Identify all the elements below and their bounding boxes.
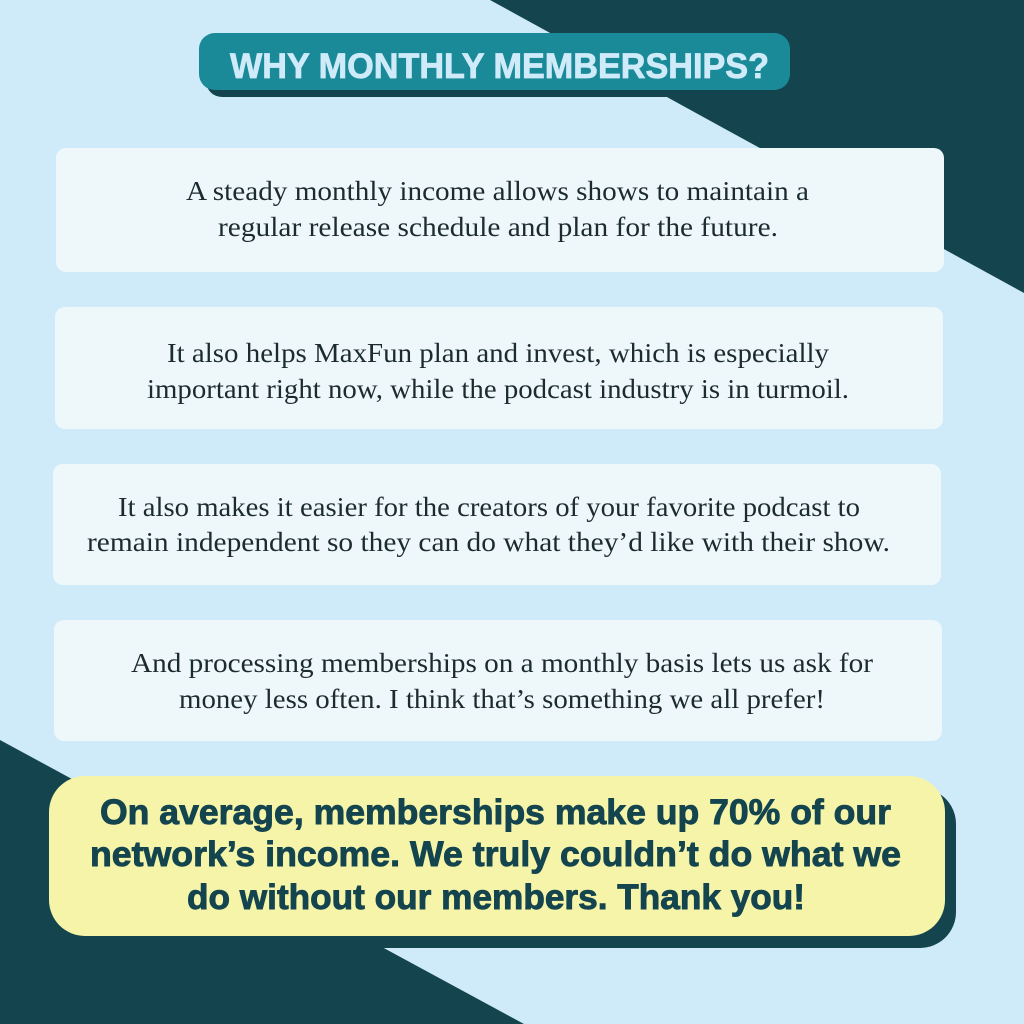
panel: plan and invest xyxy=(55,307,943,429)
callout: thank you: do without our members. Thank you! xyxy=(187,878,805,917)
panel: ask less often: money less often. I think that’s something we all prefer! xyxy=(179,684,825,714)
panel: plan and invest: It also helps MaxFun plan and invest, which is especially xyxy=(167,338,830,368)
callout: thank you: On average, memberships make up 70% of our xyxy=(100,793,891,832)
title banner xyxy=(199,33,790,97)
panel: plan and invest: important right now, while the podcast industry is in turmoil. xyxy=(147,374,849,404)
panel: independent creators: It also makes it easier for the creators of your favorite podcast to xyxy=(118,492,860,522)
panel: steady income: A steady monthly income allows shows to maintain a xyxy=(186,176,809,206)
title banner: WHY MONTHLY MEMBERSHIPS? xyxy=(230,47,769,86)
panel: ask less often xyxy=(54,620,942,741)
panel: independent creators xyxy=(53,464,941,585)
panel: independent creators: remain independent so they can do what they’d like with their show. xyxy=(87,527,890,557)
callout: thank you xyxy=(49,776,956,948)
panel: ask less often: And processing memberships on a monthly basis lets us ask for xyxy=(131,648,873,678)
top right dark triangle xyxy=(490,0,1024,293)
panel: steady income xyxy=(56,148,944,272)
callout: thank you: network’s income. We truly couldn’t do what we xyxy=(90,835,901,874)
panel: steady income: regular release schedule and plan for the future. xyxy=(218,212,778,242)
bottom left dark triangle xyxy=(0,740,524,1024)
